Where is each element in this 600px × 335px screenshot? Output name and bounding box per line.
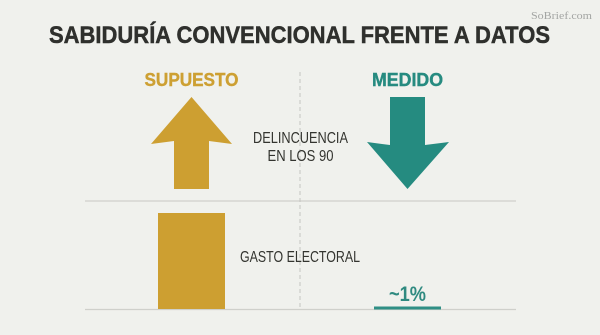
- icon: down arrow measured: [367, 97, 449, 189]
- heading: supuesto: SUPUESTO: [144, 70, 238, 90]
- bar: measured campaign spending: [374, 306, 441, 310]
- icon: up arrow assumed: [151, 97, 232, 189]
- value: about one percent: ~1%: [389, 283, 426, 306]
- label: gasto electoral: GASTO ELECTORAL: [240, 249, 360, 266]
- heading: medido: MEDIDO: [372, 70, 443, 90]
- bar: assumed campaign spending: [158, 213, 225, 309]
- label: delincuencia en los 90: DELINCUENCIA: [253, 130, 349, 147]
- watermark: SoBrief.com: [531, 11, 592, 22]
- label: delincuencia en los 90: EN LOS 90: [268, 148, 334, 165]
- title: SABIDURÍA CONVENCIONAL FRENTE A DATOS: [49, 21, 550, 49]
- label: delincuencia en los 90: [253, 130, 349, 165]
